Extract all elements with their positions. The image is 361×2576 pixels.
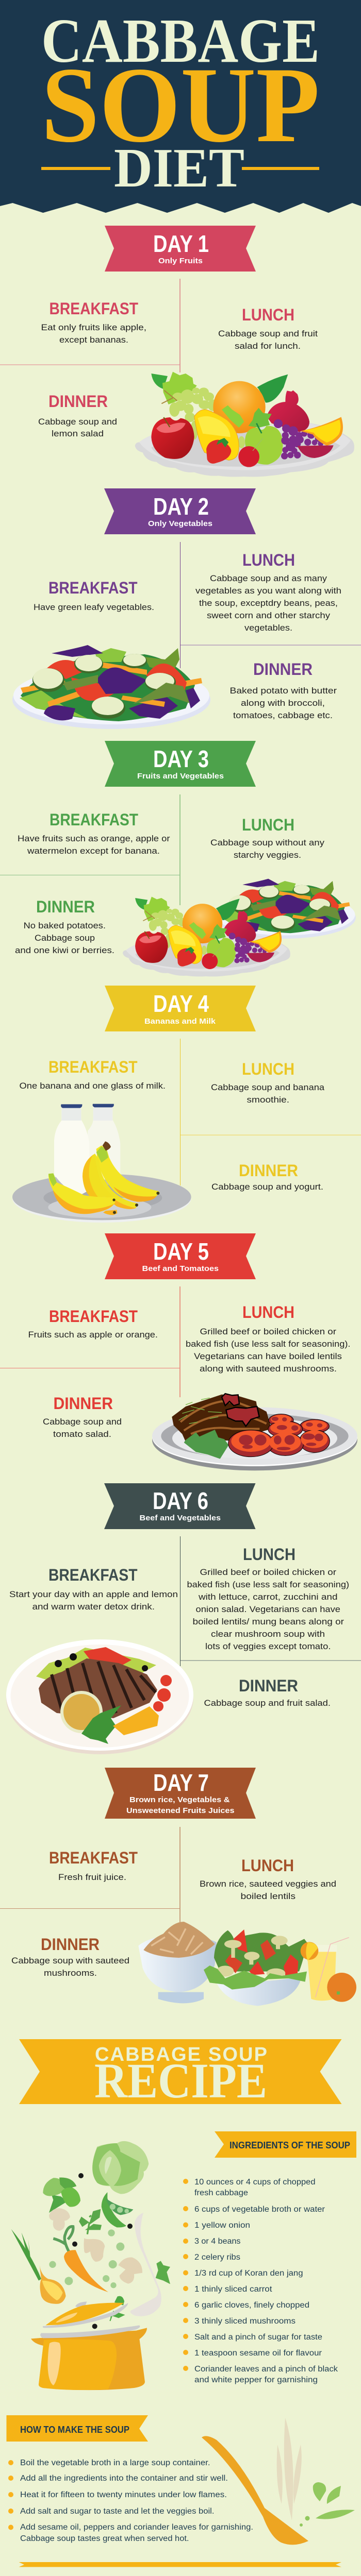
ingredients list: Salt and a pinch of sugar for taste [194,2333,322,2342]
day 3 ribbon: Fruits and Vegetables [137,772,224,781]
dinner [230,660,337,720]
diet plan days [0,0,361,2006]
panel: day 3 [0,741,356,976]
day 1 ribbon: DAY 1 [153,230,209,257]
dinner: Cabbage soup and fruit salad. [204,1698,331,1708]
spoon illustration [202,2418,355,2545]
how to banner [6,2415,148,2442]
ingredients list: 1 yellow onion [194,2221,250,2230]
breakfast [9,1566,178,1612]
lunch [218,306,318,351]
lunch: clear mushroom soup with [211,1629,325,1639]
lunch: Brown rice, sauteed veggies and [200,1879,336,1889]
dinner [11,1935,129,1978]
lunch: starchy veggies. [234,850,301,860]
day 7 ribbon: Unsweetened Fruits Juices [126,1806,234,1815]
lunch: baked fish (use less salt for seasoning). [186,1339,351,1349]
dinner [38,392,117,438]
breakfast [28,1307,158,1340]
breakfast: BREAKFAST [50,299,138,318]
method steps: Add salt and sugar to taste and let the veggies boil. [20,2507,215,2516]
ingredients list: 2 celery ribs [194,2253,240,2262]
breakfast: Fruits such as apple or orange. [28,1330,158,1340]
salad illustration [12,645,210,729]
breakfast: BREAKFAST [48,1566,138,1584]
lunch: Cabbage soup and as many [210,573,327,583]
day 4 ribbon [105,986,256,1031]
day 1 ribbon: Only Fruits [158,257,203,265]
ingredients list: 3 thinly sliced mushrooms [194,2317,296,2326]
day 1 ribbon [105,226,256,272]
ingredients list: 10 ounces or 4 cups of chopped [194,2178,316,2187]
day 7 ribbon: Brown rice, Vegetables & [129,1795,230,1804]
beef and tomatoes illustration [152,1394,357,1470]
ingredients list: fresh cabbage [194,2189,248,2197]
day 7 ribbon [105,1768,256,1819]
lunch [187,1545,349,1651]
lunch: Cabbage soup and banana [211,1082,325,1092]
dinner: Cabbage soup and yogurt. [211,1182,323,1192]
lunch: onion salad. Vegetarians can have [196,1604,340,1614]
dinner: mushrooms. [44,1968,97,1978]
ingredients list: 1/3 rd cup of Koran den jang [194,2269,303,2278]
day 5 ribbon: Beef and Tomatoes [142,1264,219,1273]
lunch: baked fish (use less salt for seasoning) [187,1580,349,1589]
dinner [15,897,114,955]
day 4 ribbon: Bananas and Milk [144,1017,216,1026]
dinner: and one kiwi or berries. [15,945,114,955]
breakfast [20,1058,166,1091]
ingredients list: 6 garlic cloves, finely chopped [194,2301,309,2310]
day 2 ribbon: DAY 2 [153,493,209,520]
breakfast [41,299,146,345]
lunch: sweet corn and other starchy [207,611,331,620]
panel: day 2 [12,488,361,729]
dinner: Baked potato with butter [230,686,337,696]
dinner: lemon salad [52,429,104,438]
lunch: LUNCH [242,1060,294,1078]
lunch: LUNCH [242,1303,294,1321]
ingredients list: Coriander leaves and a pinch of black [194,2365,338,2374]
panel: day 7 [0,1768,356,2006]
dinner: DINNER [54,1394,113,1413]
dinner: tomatoes, cabbage etc. [233,710,333,720]
breakfast: BREAKFAST [49,1307,138,1326]
breakfast: and warm water detox drink. [32,1602,155,1612]
breakfast: Have fruits such as orange, apple or [18,834,170,843]
breakfast: BREAKFAST [48,1058,138,1076]
ingredients banner: INGREDIENTS OF THE SOUP [229,2140,350,2150]
method steps [8,2459,253,2543]
lunch: LUNCH [242,306,294,324]
breakfast: BREAKFAST [50,810,138,829]
dinner: DINNER [253,660,313,679]
breakfast: Start your day with an apple and lemon [9,1589,178,1599]
breakfast: Fresh fruit juice. [58,1872,126,1882]
dinner: tomato salad. [53,1429,111,1439]
lunch: salad for lunch. [235,341,301,351]
breakfast [34,579,154,612]
ingredients list: 6 cups of vegetable broth or water [194,2205,325,2214]
panel: day 5 [0,1233,357,1470]
lunch: vegetables. [244,623,292,633]
title: SOUP [41,45,320,165]
recipe ribbon: RECIPE [94,2053,267,2108]
lunch [195,551,341,633]
dinner: along with broccoli, [241,698,325,708]
lunch: Grilled beef or boiled chicken or [200,1567,336,1577]
lunch: boiled lentils/ mung beans along or [193,1617,344,1626]
lunch: Grilled beef or boiled chicken or [200,1327,336,1336]
lunch: LUNCH [242,551,295,569]
dinner: DINNER [239,1161,298,1180]
day 2 ribbon [104,488,256,534]
breakfast: BREAKFAST [49,1849,138,1867]
method steps: Add all the ingredients into the container and stir well. [20,2474,228,2483]
title: CABBAGE [41,6,320,76]
dinner: DINNER [48,392,108,411]
day 6 ribbon [104,1483,256,1529]
lunch: vegetables as you want along with [195,586,341,596]
lunch: with lettuce, carrot, zucchini and [198,1592,337,1602]
header panel [0,0,361,213]
breakfast: BREAKFAST [48,579,138,597]
method steps: Boil the vegetable broth in a large soup container. [20,2459,210,2467]
dinner: Cabbage soup and [38,417,117,427]
title [41,6,320,199]
dinner: No baked potatoes. [24,921,106,930]
dinner [43,1394,122,1439]
lunch: Vegetarians can have boiled lentils [194,1351,342,1361]
recipe ribbon [19,2039,341,2108]
day 6 ribbon: Beef and Vegetables [139,1514,221,1522]
breakfast: Eat only fruits like apple, [41,323,146,332]
day 3 ribbon [105,741,256,787]
lunch [200,1856,336,1901]
panel: recipe [6,2039,356,2567]
method steps: Cabbage soup tastes great when served hot. [20,2534,189,2543]
dinner [211,1161,323,1192]
steak plate illustration [6,1639,193,1754]
breakfast [49,1849,138,1882]
lunch: LUNCH [242,816,294,834]
lunch: along with sauteed mushrooms. [200,1364,337,1374]
day 7 ribbon: DAY 7 [153,1769,209,1796]
day 4 ribbon: DAY 4 [153,990,209,1017]
lunch [186,1303,351,1374]
ingredients list: 1 teaspoon sesame oil for flavour [194,2349,322,2358]
panel: day 1 [0,226,354,477]
lunch: lots of veggies except tomato. [205,1641,331,1651]
method steps: Heat it for fifteen to twenty minutes under low flames. [20,2490,227,2499]
how to banner: HOW TO MAKE THE SOUP [20,2425,129,2435]
day 6 ribbon: DAY 6 [153,1487,208,1514]
lunch [211,1060,325,1105]
day 2 ribbon: Only Vegetables [148,519,212,528]
recipe ribbon: CABBAGE SOUP [95,2044,267,2065]
dinner: Cabbage soup with sauteed [11,1956,129,1965]
dinner: DINNER [239,1676,298,1695]
day 3 ribbon: DAY 3 [153,745,209,772]
title: DIET [114,138,244,199]
fruit plate illustration [135,372,354,477]
milk and bananas illustration [12,1104,191,1223]
ingredients list: and white pepper for garnishing [194,2376,318,2384]
lunch: Cabbage soup without any [210,838,325,848]
ingredients list: 3 or 4 beans [194,2237,241,2246]
ingredients list: 1 thinly sliced carrot [194,2285,272,2294]
lunch: boiled lentils [240,1891,296,1901]
panel: day 4 [12,986,361,1223]
salad and fruit illustration [123,879,356,976]
lunch: Cabbage soup and fruit [218,329,318,338]
day 5 ribbon: DAY 5 [153,1238,209,1265]
breakfast: Have green leafy vegetables. [34,602,154,612]
lunch: LUNCH [243,1545,296,1564]
rice, salad and juice illustration [138,1922,356,2006]
lunch: smoothie. [247,1095,289,1105]
ingredients banner [215,2131,356,2158]
soup pot illustration [11,2141,170,2390]
lunch [210,816,325,860]
breakfast: One banana and one glass of milk. [20,1081,166,1091]
breakfast: except bananas. [59,335,128,345]
panel: day 6 [6,1483,361,1754]
day 5 ribbon [105,1233,256,1279]
breakfast: watermelon except for banana. [27,846,160,856]
lunch: the soup, exceptdry beans, peas, [199,598,338,608]
dinner: DINNER [36,897,95,916]
lunch: LUNCH [241,1856,294,1875]
breakfast [18,810,170,856]
recipe, benefits and reminders [6,2039,356,2567]
dinner: Cabbage soup and [43,1417,122,1427]
dinner [204,1676,331,1708]
method steps: Add sesame oil, peppers and coriander leaves for garnishing. [20,2523,253,2532]
dinner: DINNER [41,1935,100,1954]
dinner: Cabbage soup [35,933,95,943]
ingredients list [183,2178,338,2384]
